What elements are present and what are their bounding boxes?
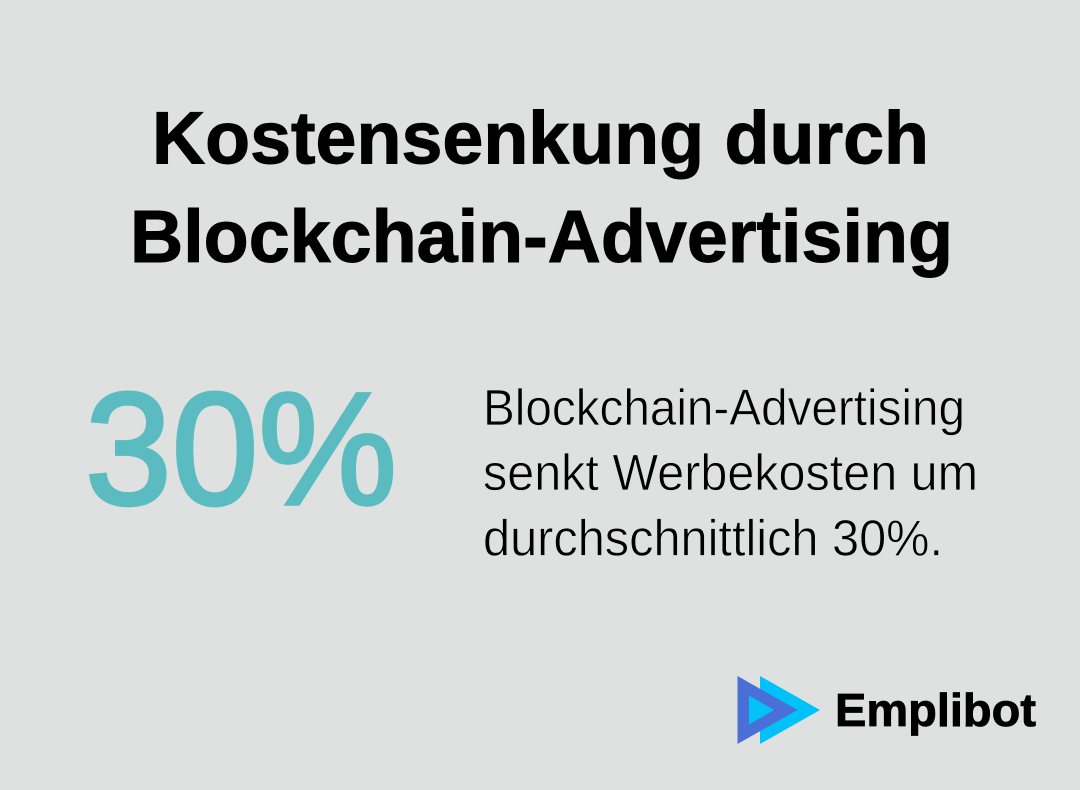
- title: Blockchain-Advertising: [130, 195, 953, 278]
- icon: play triangles: [738, 676, 820, 744]
- description text: senkt Werbekosten um: [483, 444, 978, 501]
- description text: [483, 379, 978, 566]
- description text: Blockchain-Advertising: [483, 379, 965, 436]
- description text: durchschnittlich 30%.: [483, 510, 943, 566]
- title: Kostensenkung durch: [152, 96, 929, 180]
- title: [130, 96, 953, 278]
- logo: Emplibot: [738, 676, 1036, 744]
- big statistic: 30%: 30%: [85, 359, 397, 538]
- logo wordmark: Emplibot: [835, 684, 1036, 736]
